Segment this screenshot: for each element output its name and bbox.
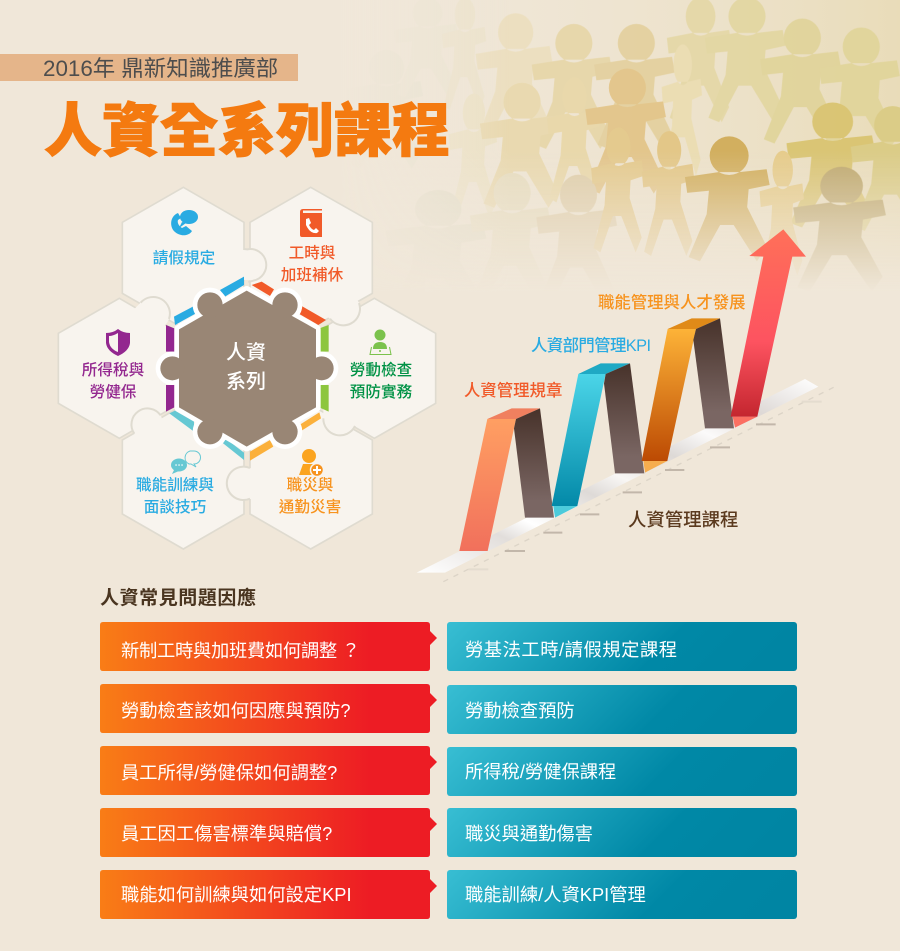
problem row 3 — [100, 746, 437, 795]
ribbon: orange — [642, 318, 734, 473]
course row 2: 勞動檢查預防 — [465, 700, 575, 721]
hexagon puzzle diagram — [58, 187, 436, 549]
title: 人資全系列課程 — [44, 99, 450, 164]
course row 2 — [447, 685, 797, 734]
ribbon labels: 人資管理課程 — [628, 509, 738, 530]
course row 3: 所得稅/勞健保課程 — [465, 761, 616, 782]
course row 5: 職能訓練/人資KPI管理 — [465, 884, 646, 905]
problem row 5 — [100, 870, 437, 919]
icon: phone and chat — [171, 210, 198, 235]
icon: shield — [106, 329, 130, 356]
icon: phone book — [300, 209, 322, 237]
panel: course list — [447, 622, 797, 919]
base strip — [417, 379, 818, 573]
icon: chat bubbles — [171, 451, 201, 474]
course row 3 — [447, 747, 797, 796]
puzzle tabs — [130, 249, 361, 500]
problem row 1: 新制工時與加班費如何調整 ？ — [121, 640, 360, 661]
hexagon labels: 職能訓練與 — [136, 476, 214, 494]
hexagon labels: 加班補休 — [281, 266, 344, 284]
ribbon labels: 人資部門管理KPI — [531, 336, 651, 355]
ribbon labels: 職能管理與人才發展 — [598, 293, 746, 312]
hexagon labels: 面談技巧 — [144, 498, 207, 516]
hexagon labels: 職災與 — [287, 476, 333, 494]
center hexagon — [160, 291, 334, 447]
icon: person with laptop — [370, 330, 391, 354]
course row 4 — [447, 808, 797, 857]
problem row 2: 勞動檢查該如何因應與預防? — [121, 700, 351, 721]
panel: hexagon pieces — [58, 187, 436, 549]
hexagon labels: 預防實務 — [350, 383, 413, 401]
dashes — [443, 385, 838, 582]
problem row 5: 職能如何訓練與如何設定KPI — [121, 884, 352, 905]
hexagon labels: 勞動檢查 — [350, 360, 412, 379]
problem row 4 — [100, 808, 437, 857]
center label: 系列 — [226, 370, 266, 393]
hexagon labels: 所得稅與 — [82, 361, 144, 379]
ribbon: teal — [552, 363, 644, 518]
hexagon labels: 請假規定 — [153, 248, 216, 267]
course row 1 — [447, 622, 797, 671]
course row 5 — [447, 870, 797, 919]
problem row 3: 員工所得/勞健保如何調整? — [121, 762, 337, 783]
ribbon: coral — [459, 408, 554, 551]
background: paper people chain — [340, 0, 900, 315]
course row 1: 勞基法工時/請假規定課程 — [465, 639, 677, 660]
hexagon labels: 勞健保 — [90, 383, 137, 401]
ribbon labels: 人資管理規章 — [464, 381, 562, 400]
coloured ring segments — [166, 277, 329, 461]
arrow: red — [731, 229, 806, 428]
year band: 2016年 鼎新知識推廣部 — [43, 56, 278, 81]
hexagon labels: 工時與 — [289, 244, 335, 262]
ribbon growth chart — [417, 229, 838, 582]
section heading: 人資常見問題因應 — [100, 586, 256, 609]
problem row 4: 員工因工傷害標準與賠償? — [121, 823, 332, 844]
problem row 1 — [100, 622, 437, 671]
ribbon labels — [464, 293, 746, 530]
center label — [226, 341, 266, 393]
problem row 2 — [100, 684, 437, 733]
icon: person with plus — [299, 449, 324, 476]
hexagon labels — [82, 244, 413, 516]
center label: 人資 — [226, 341, 266, 364]
course row 4: 職災與通勤傷害 — [465, 823, 593, 844]
hexagon labels: 通勤災害 — [279, 497, 341, 516]
panel: problem list — [100, 622, 437, 919]
